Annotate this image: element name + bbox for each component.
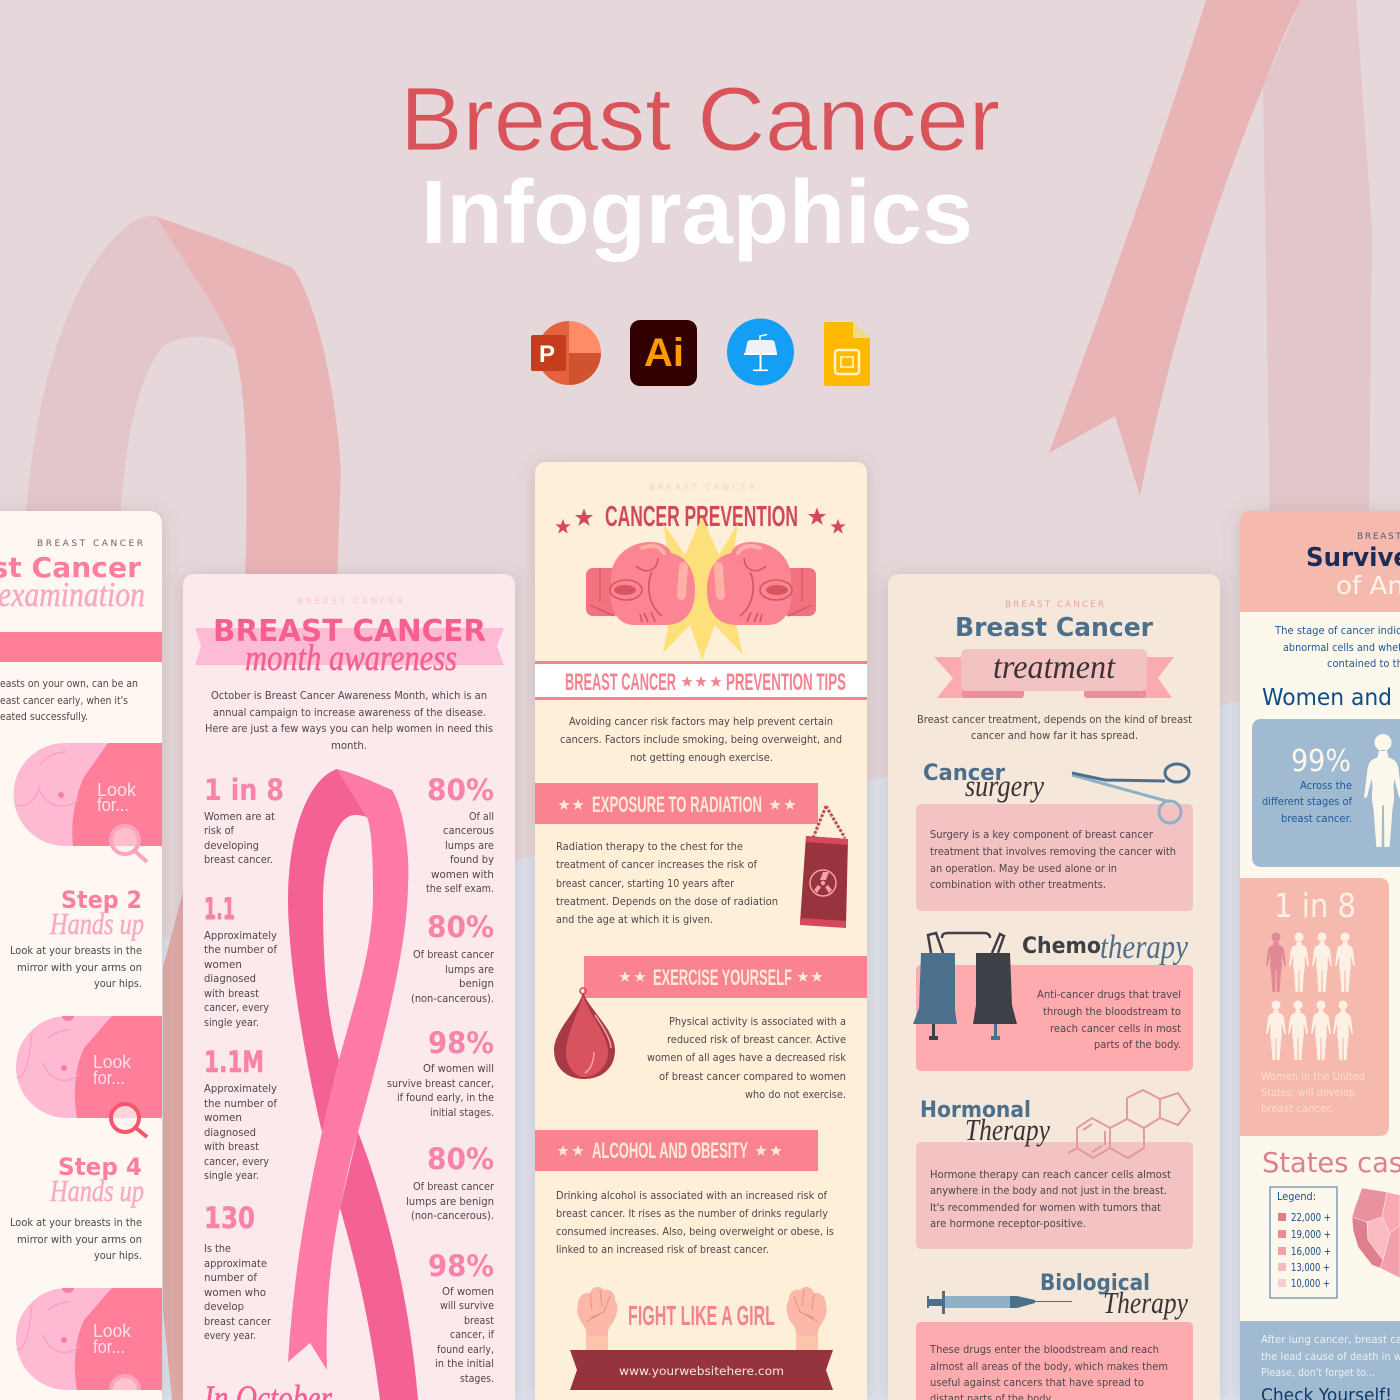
section: exposure to radiation: treatment. Depends on the dose of radiation <box>556 896 778 908</box>
panel: self examination: BREAST CANCER <box>37 539 143 549</box>
heading: chemotherapy: Chemo <box>1022 934 1101 959</box>
stat: 1 in 8 <box>204 773 284 866</box>
stat: 80% self exam: women with <box>431 869 494 881</box>
step 2: Step 2 <box>61 886 142 914</box>
intro text: cancers. Factors include smoking, being overweight, and <box>560 734 842 746</box>
stat: 98% survive: if found early, in the <box>397 1092 494 1104</box>
intro text <box>0 678 138 723</box>
stat: 1.1M: women <box>204 1112 242 1124</box>
stat: 98% survive early: stages. <box>460 1373 494 1385</box>
stat: 98% survive: initial stages. <box>430 1107 494 1119</box>
section: exposure to radiation: treatment of cancer increases the risk of <box>556 859 757 871</box>
intro text <box>917 714 1192 742</box>
card: 1 in 8: breast cancer. <box>1261 1103 1333 1115</box>
stat: 130: approximate <box>204 1258 267 1270</box>
surgery text: treatment that involves removing the cancer with <box>930 846 1176 858</box>
header block: of An <box>1336 571 1400 600</box>
heading: cancer prevention with stars: CANCER PREVENTION <box>605 501 798 533</box>
step 2: mirror with your arms on <box>17 962 142 974</box>
stat: 1.1 <box>204 892 277 1029</box>
title: Infographics <box>421 163 973 263</box>
icon: molecule <box>1068 1090 1190 1158</box>
panel: treatment <box>888 574 1220 1400</box>
step 2 illustration: Look <box>93 1052 132 1072</box>
legend: 22,000 + <box>1291 1212 1331 1224</box>
intro text: Avoiding cancer risk factors may help prevent certain <box>569 716 833 728</box>
stat: 1.1: Approximately <box>204 930 277 942</box>
fight like a girl <box>570 1287 833 1390</box>
decorative ribbon right <box>1049 0 1372 520</box>
legend: Legend: <box>1277 1191 1316 1203</box>
icon: Google Slides <box>824 322 870 386</box>
section: alcohol and obesity: consumed increases. Also, being overweight or obese, is <box>556 1226 834 1238</box>
stat: 1.1: the number of <box>204 944 277 956</box>
step 4 <box>10 1153 144 1262</box>
stat: 1.1: with breast <box>204 988 259 1000</box>
title: Breast Cancer <box>400 70 1000 170</box>
stat: 1.1: women <box>204 959 242 971</box>
section: exercise yourself: who do not exercise. <box>745 1089 846 1101</box>
section: alcohol and obesity <box>535 1130 834 1256</box>
intro text: easts on your own, can be an <box>0 678 138 690</box>
decorative ribbon left <box>26 216 341 1400</box>
section: surgery box <box>916 804 1193 911</box>
panel: treatment: BREAST CANCER <box>1005 600 1104 610</box>
stat: 80% benign lumps <box>406 1142 495 1222</box>
card: 1 in 8: States, will develop <box>1261 1087 1355 1099</box>
stat: 1.1M: 1.1M <box>204 1045 264 1079</box>
icon: scissors <box>1072 764 1189 823</box>
stat: 1.1: diagnosed <box>204 973 256 985</box>
section: exposure to radiation <box>535 783 818 926</box>
section: exposure to radiation: and the age at which it is given. <box>556 914 713 926</box>
surgery text: an operation. May be used alone or in <box>930 863 1117 875</box>
stat: 98% survive early: will survive <box>440 1300 494 1312</box>
heading: breast cancer self examination <box>0 551 145 614</box>
stat: 1.1M: diagnosed <box>204 1127 256 1139</box>
stat: 1.1M: single year. <box>204 1170 259 1182</box>
stat: 80% benign lumps: 80% <box>427 1142 494 1176</box>
step 4: mirror with your arms on <box>17 1234 142 1246</box>
stat: 1 in 8: Women are at <box>204 811 275 823</box>
stat: 1.1: cancer, every <box>204 1002 269 1014</box>
stat: 98% survive early: 98% <box>428 1249 494 1283</box>
icon: Keynote <box>727 318 794 386</box>
step 4: Look at your breasts in the <box>10 1217 142 1229</box>
icon: PowerPoint <box>531 321 601 385</box>
icon: PowerPoint: P <box>539 341 555 368</box>
section: exercise yourself <box>584 956 867 1101</box>
intro text <box>1274 625 1400 670</box>
card: 99%: 99% <box>1291 744 1351 779</box>
icon: Illustrator <box>630 320 697 386</box>
step 2: Hands up <box>49 906 144 941</box>
chemo text <box>1037 989 1181 1051</box>
icon: speed bag <box>554 988 615 1079</box>
heading: biological therapy: Biological <box>1040 1271 1150 1296</box>
card: 1 in 8 <box>1240 878 1389 1136</box>
stat: 98% survive early <box>428 1249 494 1385</box>
stat: 80% self exam: lumps are <box>445 840 494 852</box>
stat: 80% self exam: 80% <box>427 773 494 807</box>
stat: 130: every year. <box>204 1330 256 1342</box>
intro text: cancer and how far it has spread. <box>971 730 1138 742</box>
stat: 98% survive early: Of women <box>442 1286 494 1298</box>
heading: hormonal therapy: Therapy <box>965 1112 1050 1147</box>
stat: 130 <box>204 1201 272 1342</box>
icon row: women figures <box>1266 932 1355 1060</box>
icon: punching bag <box>800 806 848 928</box>
stat: 80% benign: (non-cancerous). <box>411 993 494 1005</box>
step 1 illustration: for... <box>97 795 129 815</box>
intro text: October is Breast Cancer Awareness Month, which is an <box>211 690 487 702</box>
intro text: Breast cancer treatment, depends on the kind of breast <box>917 714 1192 726</box>
legend: 10,000 + <box>1291 1278 1330 1290</box>
step 4 illustration <box>16 1288 162 1390</box>
biological text <box>929 1344 1168 1400</box>
step 2: your hips. <box>94 978 142 990</box>
card: 1 in 8: Women in the United <box>1261 1071 1365 1083</box>
stat: 1.1M: the number of <box>204 1098 277 1110</box>
stat: 1 in 8: 1 in 8 <box>204 773 284 807</box>
ribbon: treatment <box>934 649 1174 698</box>
step 2: Look at your breasts in the <box>10 945 142 957</box>
stat: 130: breast cancer <box>204 1316 272 1328</box>
map: US states <box>1352 1188 1400 1278</box>
icon: pink ribbon <box>288 769 418 1400</box>
stat: 98% survive early: cancer, if <box>450 1329 494 1341</box>
legend: 13,000 + <box>1291 1262 1330 1274</box>
hormone text <box>930 1169 1171 1230</box>
surgery text <box>930 829 1176 891</box>
stat: 1 in 8: breast cancer. <box>204 854 273 866</box>
footer block <box>1240 1321 1400 1400</box>
panel: month awareness <box>183 574 515 1400</box>
icon: syringe <box>927 1291 1072 1314</box>
heading: women and: Women and <box>1262 685 1392 711</box>
stat: 80% benign lumps: lumps are benign <box>406 1196 494 1208</box>
step 2 illustration <box>16 1016 162 1137</box>
band: prevention tips: PREVENTION TIPS <box>726 669 846 696</box>
chemo text: through the bloodstream to <box>1043 1006 1181 1018</box>
stat: 80% self exam: cancerous <box>443 825 494 837</box>
stat: 1.1M: cancer, every <box>204 1156 269 1168</box>
section: cancer surgery heading: surgery <box>965 768 1044 803</box>
stat: 98% survive early: found early, <box>437 1344 494 1356</box>
stat: 80% benign: benign <box>459 978 494 990</box>
step 2 <box>10 886 144 990</box>
header block: BREAST <box>1357 532 1400 542</box>
chemo text: reach cancer cells in most <box>1050 1023 1181 1035</box>
stat: 80% benign <box>411 910 495 1005</box>
stat: 98% survive: survive breast cancer, <box>387 1078 494 1090</box>
chemo text: parts of the body. <box>1094 1039 1181 1051</box>
stat: 1.1M: Approximately <box>204 1083 277 1095</box>
heading banner: month awareness <box>245 638 457 679</box>
stat: 1 in 8: risk of <box>204 825 234 837</box>
section: cancer surgery heading <box>923 761 1044 803</box>
footer block: Please, don't forget to... <box>1261 1367 1375 1379</box>
section: biological box <box>916 1322 1193 1400</box>
heading: cancer prevention with stars <box>555 501 846 534</box>
section: alcohol and obesity: breast cancer. It rises as the number of drinks regularly <box>556 1208 828 1220</box>
heading: biological therapy <box>1040 1271 1188 1320</box>
surgery text: Surgery is a key component of breast cancer <box>930 829 1154 841</box>
step 2 illustration: for... <box>93 1068 125 1088</box>
intro text <box>205 690 493 752</box>
card: 99%: breast cancer. <box>1281 813 1352 825</box>
stat: 80% benign lumps: Of breast cancer <box>413 1181 495 1193</box>
heading: Breast Cancer <box>955 613 1153 643</box>
stat: 80% self exam: the self exam. <box>426 883 494 895</box>
stat: 130: develop <box>204 1301 244 1313</box>
section: cancer surgery heading: Cancer <box>923 761 1005 786</box>
card: 99% <box>1252 719 1400 867</box>
step 1 illustration: Look <box>97 780 137 800</box>
step 4: your hips. <box>94 1250 142 1262</box>
stat: 130: 130 <box>204 1201 255 1235</box>
hormone text: anywhere in the body and not just in the breast. <box>930 1185 1167 1197</box>
section: alcohol and obesity: linked to an increased risk of breast cancer. <box>556 1244 769 1256</box>
stat: 98% survive: 98% <box>428 1026 494 1060</box>
heading: hormonal therapy: Hormonal <box>920 1098 1031 1123</box>
card: 99%: different stages of <box>1262 796 1352 808</box>
step 4 illustration: for... <box>93 1337 125 1357</box>
stat: 98% survive early: in the initial <box>435 1358 494 1370</box>
intro text <box>560 716 842 764</box>
panel: cancer prevention <box>535 462 867 1400</box>
section: exposure to radiation: breast cancer, starting 10 years after <box>556 878 735 890</box>
stat: 80% self exam: Of all <box>469 811 494 823</box>
biological text: useful against cancers that have spread to <box>930 1377 1144 1389</box>
section: exercise yourself: women of all ages have a decreased risk <box>647 1052 846 1064</box>
intro text: eated successfully. <box>0 711 88 723</box>
panel: survivors <box>1240 511 1400 1400</box>
section: exercise yourself: of breast cancer compared to women <box>659 1071 846 1083</box>
surgery text: combination with other treatments. <box>930 879 1106 891</box>
title <box>400 70 1000 263</box>
illustration: boxing gloves <box>586 517 816 660</box>
intro text: month. <box>331 740 367 752</box>
icon: Illustrator: Ai <box>644 331 684 375</box>
stat: 80% benign: Of breast cancer <box>413 949 495 961</box>
stat: 80% benign: 80% <box>427 910 494 944</box>
section: exercise yourself: EXERCISE YOURSELF <box>653 965 792 990</box>
section: alcohol and obesity: ALCOHOL AND OBESITY <box>592 1138 748 1163</box>
stat: 1.1M: with breast <box>204 1141 259 1153</box>
stat: 98% survive <box>387 1026 494 1119</box>
step 1 illustration <box>14 743 162 862</box>
biological text: almost all areas of the body, which makes them <box>930 1361 1168 1373</box>
header block <box>1240 511 1400 612</box>
stat: 130: number of <box>204 1272 257 1284</box>
band: prevention tips: BREAST CANCER <box>565 669 676 696</box>
stat: 80% benign: lumps are <box>445 964 494 976</box>
app icons row <box>531 318 870 386</box>
legend: 19,000 + <box>1291 1229 1331 1241</box>
stat: 130: women who <box>204 1287 266 1299</box>
section: chemo box <box>916 965 1193 1071</box>
section: alcohol and obesity: Drinking alcohol is associated with an increased risk of <box>556 1190 827 1202</box>
intro text: not getting enough exercise. <box>630 752 773 764</box>
step 4 illustration: Look <box>93 1321 132 1341</box>
intro text: east cancer early, when it's <box>0 695 128 707</box>
legend: 16,000 + <box>1291 1246 1331 1258</box>
stat: 1.1M <box>204 1045 277 1182</box>
biological text: These drugs enter the bloodstream and reach <box>929 1344 1159 1356</box>
intro text: Here are just a few ways you can help women in need this <box>205 723 493 735</box>
stat: 80% self exam: found by <box>450 854 494 866</box>
heading: chemotherapy <box>1022 929 1189 966</box>
section: exercise yourself: Physical activity is associated with a <box>669 1016 846 1028</box>
stat: 98% survive: Of women will <box>423 1063 494 1075</box>
step 4: Step 4 <box>58 1153 142 1181</box>
stat: 1.1: single year. <box>204 1017 259 1029</box>
heading: chemotherapy: therapy <box>1100 929 1189 966</box>
card: 1 in 8: 1 in 8 <box>1274 886 1356 925</box>
stat: 1.1: 1.1 <box>204 892 235 926</box>
heading: hormonal therapy <box>920 1098 1050 1147</box>
section: hormonal box <box>916 1142 1193 1249</box>
hormone text: It's recommended for women with tumors that <box>930 1202 1161 1214</box>
ribbon: treatment: treatment <box>993 649 1116 686</box>
panel: cancer prevention: BREAST CANCER <box>649 483 755 493</box>
band: prevention tips <box>535 661 867 700</box>
chemo text: Anti-cancer drugs that travel <box>1037 989 1181 1001</box>
stat: 1 in 8: developing <box>204 840 259 852</box>
stat: 98% survive early: breast <box>464 1315 494 1327</box>
stat: 80% self exam <box>426 773 494 895</box>
section: exposure to radiation: Radiation therapy to the chest for the <box>556 841 743 853</box>
hormone text: Hormone therapy can reach cancer cells almost <box>930 1169 1171 1181</box>
stat: 130: Is the <box>204 1243 231 1255</box>
stat: 80% benign lumps: (non-cancerous). <box>411 1210 494 1222</box>
panel: self examination <box>0 511 162 1400</box>
card: 99%: Across the <box>1300 780 1352 792</box>
legend <box>1270 1187 1337 1298</box>
icon: IV bags <box>913 933 1017 1040</box>
step 4: Hands up <box>49 1173 144 1208</box>
heading banner <box>195 614 504 679</box>
fight like a girl: www.yourwebsitehere.com <box>619 1364 784 1378</box>
heading: breast cancer self examination: examination <box>0 575 145 614</box>
section: exercise yourself: reduced risk of breast cancer. Active <box>667 1034 846 1046</box>
section: exposure to radiation: EXPOSURE TO RADIATION <box>592 792 762 817</box>
panel: month awareness: BREAST CANCER <box>297 597 403 607</box>
fight like a girl: FIGHT LIKE A GIRL <box>628 1300 775 1331</box>
heading: biological therapy: Therapy <box>1103 1285 1188 1320</box>
intro text: annual campaign to increase awareness of the disease. <box>213 707 486 719</box>
hormone text: are hormone receptor-positive. <box>930 1218 1086 1230</box>
heading banner: BREAST CANCER <box>213 614 486 649</box>
